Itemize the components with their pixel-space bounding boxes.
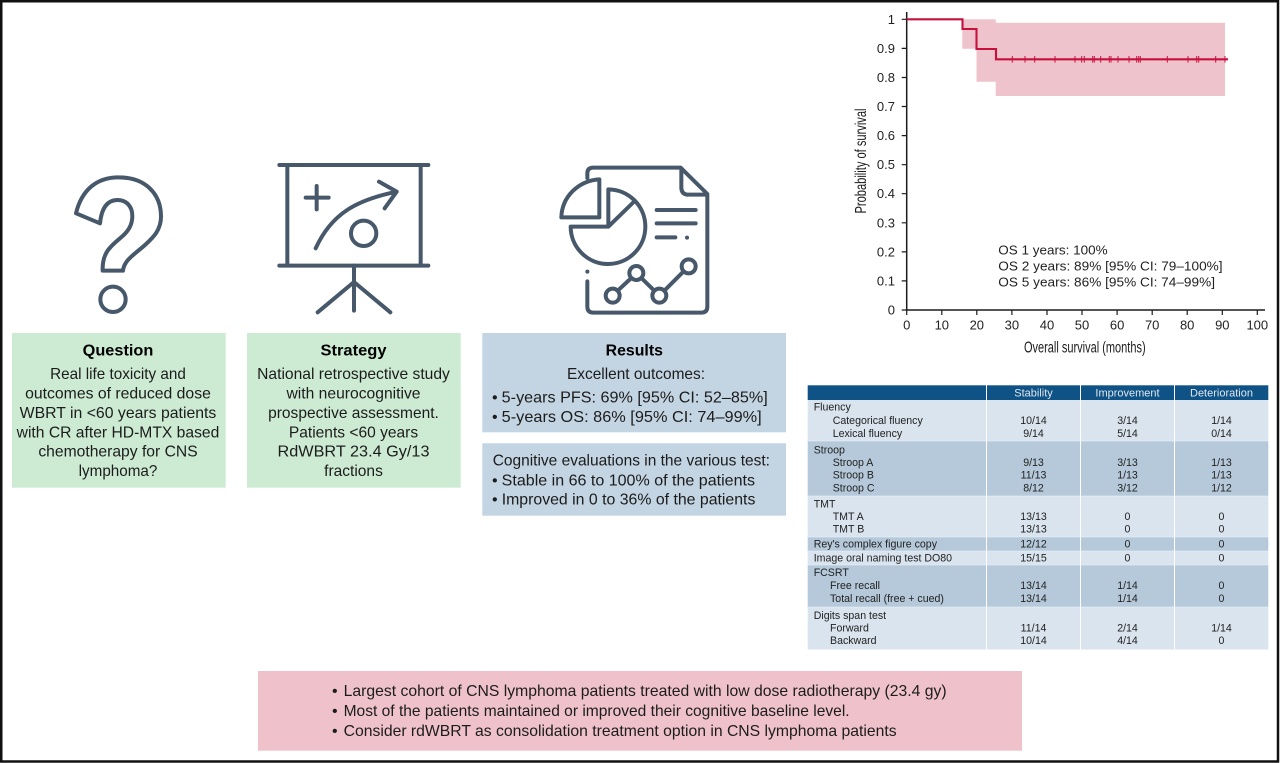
table column: improvement	[1117, 415, 1138, 647]
panel: conclusions: Most of the patients maintained or improved their cognitive baseline level.	[344, 703, 850, 720]
table header	[808, 385, 1268, 400]
table row labels: Forward	[830, 623, 869, 635]
y axis labels	[877, 12, 895, 318]
table column: deterioration: 0	[1219, 552, 1225, 564]
table column: improvement: 1/14	[1117, 593, 1138, 605]
y axis labels: 0.8	[877, 70, 895, 85]
table column: stability: 11/13	[1021, 470, 1046, 482]
table column: deterioration: 0	[1219, 580, 1225, 592]
y axis labels: 0.4	[877, 186, 895, 201]
x axis labels	[903, 318, 1268, 332]
panel: conclusions: Consider rdWBRT as consolidation treatment option in CNS lymphoma patients	[344, 723, 897, 740]
table column: stability: 13/14	[1020, 580, 1047, 592]
table column: stability: 12/12	[1020, 539, 1047, 551]
text: question body: outcomes of reduced dose	[25, 386, 211, 402]
table header: Improvement	[1095, 388, 1160, 400]
x axis labels: 50	[1075, 318, 1089, 332]
table row labels: TMT B	[833, 524, 864, 536]
panel: conclusions: •	[332, 703, 338, 720]
table column: improvement: 1/13	[1117, 470, 1138, 482]
text: question body: WBRT in <60 years patients	[20, 405, 216, 422]
text: strategy body	[257, 366, 450, 480]
panel: cognitive evaluations	[482, 443, 786, 516]
table row labels: Digits span test	[814, 610, 886, 622]
panel: question	[12, 333, 226, 488]
table row labels: Image oral naming test DO80	[814, 552, 952, 564]
y axis labels: 0	[888, 302, 895, 318]
y axis labels: 0.6	[877, 128, 895, 143]
x axis labels: 90	[1215, 318, 1230, 332]
text: question body: lymphoma?	[79, 463, 157, 480]
panel: conclusions: Largest cohort of CNS lymphoma patients treated with low dose radiotherapy (23.4 gy)	[344, 683, 947, 700]
chart: overall survival Kaplan-Meier curve	[853, 12, 1268, 357]
table row labels: Backward	[830, 635, 877, 647]
table column: stability: 13/13	[1020, 524, 1047, 536]
table: cognitive test outcomes	[808, 385, 1268, 650]
table header: Deterioration	[1190, 388, 1253, 400]
x axis title: Overall survival (months)	[1024, 340, 1146, 357]
table row labels: Fluency	[814, 402, 851, 414]
table row labels: Stroop C	[833, 482, 875, 494]
y axis labels: 0.2	[877, 244, 895, 259]
text: question body: Real life toxicity and	[50, 366, 186, 383]
censor ticks	[1012, 56, 1225, 63]
panel: cognitive evaluations: •	[492, 492, 498, 509]
table column: stability	[1020, 415, 1047, 647]
y axis labels: 0.7	[877, 99, 895, 114]
text: strategy body: National retrospective study	[257, 366, 450, 383]
survival line	[907, 19, 1228, 59]
overall survival annotations: OS 1 years: 100%	[998, 243, 1108, 258]
panel: conclusions	[258, 671, 1022, 751]
table row bands	[808, 385, 1268, 650]
table row labels: TMT	[814, 498, 836, 510]
table column: stability: 8/12	[1023, 482, 1044, 494]
icon: question mark	[76, 177, 161, 312]
text: results body: •	[492, 390, 498, 407]
table column: deterioration	[1211, 415, 1232, 647]
table column: deterioration: 0	[1219, 511, 1225, 523]
table column: deterioration: 1/12	[1211, 482, 1232, 494]
x axis labels: 20	[970, 318, 984, 332]
text: question body: with CR after HD-MTX based	[16, 424, 219, 441]
overall survival annotations: OS 2 years: 89% [95% CI: 79–100%]	[998, 259, 1223, 274]
table column: deterioration: 0	[1219, 539, 1225, 551]
text: strategy body: RdWBRT 23.4 Gy/13	[278, 444, 430, 461]
text: strategy body: Patients <60 years	[289, 424, 418, 441]
panel: cognitive evaluations: Stable in 66 to 100% of the patients	[502, 472, 755, 489]
text: strategy body: fractions	[324, 463, 383, 480]
table column: improvement: 3/12	[1117, 482, 1138, 494]
table column: deterioration: 1/13	[1211, 457, 1232, 469]
table column: improvement: 0	[1125, 552, 1131, 564]
x axis labels: 10	[935, 318, 949, 332]
overall survival annotations	[998, 243, 1223, 290]
x axis labels: 70	[1145, 318, 1159, 332]
table column: stability: 9/13	[1023, 457, 1044, 469]
heading: results: Results	[606, 343, 663, 360]
panel: cognitive evaluations: Cognitive evaluations in the various test:	[493, 453, 770, 470]
x axis labels: 60	[1110, 318, 1124, 332]
icon: report with charts	[561, 168, 707, 313]
table column: deterioration: 1/13	[1211, 470, 1232, 482]
overall survival annotations: OS 5 years: 86% [95% CI: 74–99%]	[998, 275, 1215, 290]
table column: stability: 15/15	[1020, 552, 1047, 564]
heading: question: Question	[83, 343, 153, 360]
y axis labels: 1	[888, 12, 895, 27]
table column: deterioration: 1/14	[1211, 623, 1232, 635]
text: strategy body: prospective assessment.	[268, 405, 439, 422]
table column: deterioration: 1/14	[1211, 415, 1232, 427]
table column: improvement: 2/14	[1117, 623, 1138, 635]
table row labels: Free recall	[830, 580, 880, 592]
table column: stability: 9/14	[1023, 428, 1044, 440]
table row labels: Stroop	[814, 444, 845, 456]
table column: deterioration: 0	[1219, 524, 1225, 536]
table row labels	[814, 402, 952, 647]
text: question body: chemotherapy for CNS	[38, 444, 198, 461]
panel: strategy	[247, 333, 461, 488]
table row labels: Stroop B	[833, 470, 874, 482]
x axis labels: 40	[1040, 318, 1054, 332]
table column: improvement: 0	[1125, 524, 1131, 536]
y axis labels: 0.1	[877, 273, 895, 288]
table row labels: Rey's complex figure copy	[814, 539, 938, 551]
heading: strategy: Strategy	[320, 343, 387, 360]
table row labels: TMT A	[833, 511, 865, 523]
text: results body: 5-years OS: 86% [95% CI: 74–99%]	[502, 409, 762, 426]
axes	[902, 12, 1265, 315]
table row labels: FCSRT	[814, 567, 849, 579]
table column: stability: 10/14	[1020, 635, 1047, 647]
panel: conclusions: •	[332, 683, 338, 700]
table column: improvement: 3/14	[1117, 415, 1138, 427]
icon: presentation board	[279, 165, 428, 312]
table column: deterioration: 0	[1219, 593, 1225, 605]
table row labels: Categorical fluency	[833, 415, 923, 427]
y axis title: Probability of survival	[853, 108, 870, 214]
table column: stability: 13/14	[1020, 593, 1047, 605]
table column: deterioration: 0	[1219, 635, 1225, 647]
text: strategy body: with neurocognitive	[286, 386, 421, 402]
text: question body	[16, 366, 219, 480]
panel: results	[482, 333, 786, 432]
table row labels: Total recall (free + cued)	[830, 593, 944, 605]
x axis labels: 100	[1246, 318, 1268, 332]
text: results body	[492, 366, 768, 426]
panel: cognitive evaluations: Improved in 0 to 36% of the patients	[502, 492, 755, 509]
x axis labels: 30	[1005, 318, 1019, 332]
table column: improvement: 0	[1125, 539, 1131, 551]
confidence band	[962, 19, 1225, 96]
table column: improvement: 5/14	[1117, 428, 1138, 440]
table row labels: Lexical fluency	[833, 428, 903, 440]
table column: stability: 13/13	[1020, 511, 1047, 523]
table header: Stability	[1014, 388, 1053, 400]
text: results body: Excellent outcomes:	[567, 366, 705, 383]
y axis labels: 0.9	[877, 41, 895, 56]
table row labels: Stroop A	[833, 457, 874, 469]
table column: improvement: 3/13	[1117, 457, 1138, 469]
table column: deterioration: 0/14	[1211, 428, 1232, 440]
x axis labels: 80	[1180, 318, 1194, 332]
table column: improvement: 4/14	[1117, 635, 1138, 647]
panel: cognitive evaluations: •	[492, 472, 498, 489]
text: results body: •	[492, 409, 498, 426]
y axis labels: 0.5	[877, 157, 895, 172]
table column: improvement: 0	[1125, 511, 1131, 523]
table column: stability: 11/14	[1021, 623, 1046, 635]
table column: stability: 10/14	[1020, 415, 1047, 427]
table column: improvement: 1/14	[1117, 580, 1138, 592]
y axis labels: 0.3	[877, 215, 895, 230]
panel: conclusions: •	[332, 723, 338, 740]
text: results body: 5-years PFS: 69% [95% CI: 52–85%]	[502, 390, 768, 407]
x axis labels: 0	[903, 318, 910, 332]
